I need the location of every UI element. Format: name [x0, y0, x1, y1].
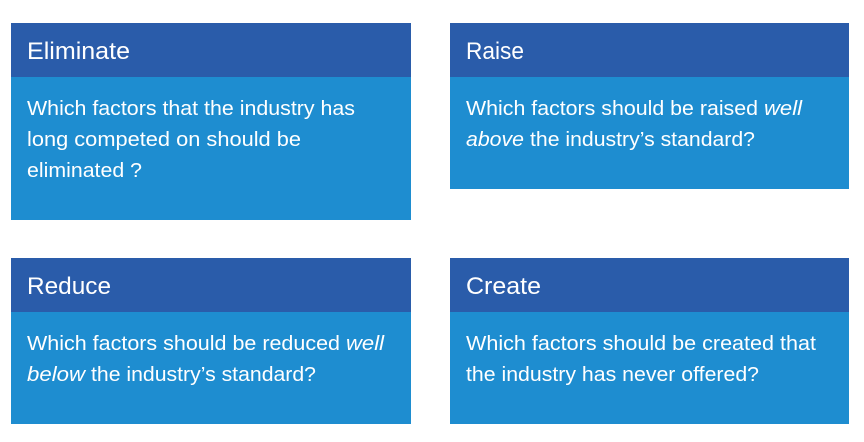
text block: Raise question: well	[764, 97, 804, 120]
panel: Raise	[450, 23, 849, 189]
text block: Eliminate question: long competed on should be	[27, 128, 301, 151]
text block: Eliminate question	[27, 97, 355, 182]
header bar: Reduce	[11, 258, 411, 312]
text block: Create question: the industry has never offered?	[466, 363, 759, 386]
panel body: Reduce	[11, 312, 411, 424]
heading: Create: Create	[466, 273, 541, 300]
heading: Raise: Raise	[466, 38, 524, 65]
text block: Raise question: Which factors should be raised	[466, 97, 758, 120]
text block: Reduce question: below	[27, 363, 86, 386]
text block: Reduce question: well	[346, 332, 386, 355]
header bar: Eliminate	[11, 23, 411, 77]
panel: Eliminate	[11, 23, 411, 220]
text block: Raise question: above	[466, 128, 524, 151]
text block: Create question: Which factors should be created that	[466, 332, 816, 355]
header bar: Create	[450, 258, 849, 312]
panel body: Eliminate	[11, 77, 411, 220]
heading: Eliminate: Eliminate	[27, 38, 130, 65]
text block: Reduce question: Which factors should be reduced	[27, 332, 340, 355]
header bar: Raise	[450, 23, 849, 77]
text block: Reduce question: the industry’s standard?	[91, 363, 316, 386]
text block: Create question	[466, 332, 816, 386]
text block: Eliminate question: Which factors that the industry has	[27, 97, 355, 120]
text block: Eliminate question: eliminated ?	[27, 159, 142, 182]
panel: Reduce	[11, 258, 411, 424]
panel: Create	[450, 258, 849, 424]
text block: Raise question	[466, 97, 804, 151]
heading: Reduce: Reduce	[27, 273, 111, 300]
text block: Reduce question	[27, 332, 386, 386]
panel body: Raise	[450, 77, 849, 189]
panel body: Create	[450, 312, 849, 424]
text block: Raise question: the industry’s standard?	[530, 128, 755, 151]
